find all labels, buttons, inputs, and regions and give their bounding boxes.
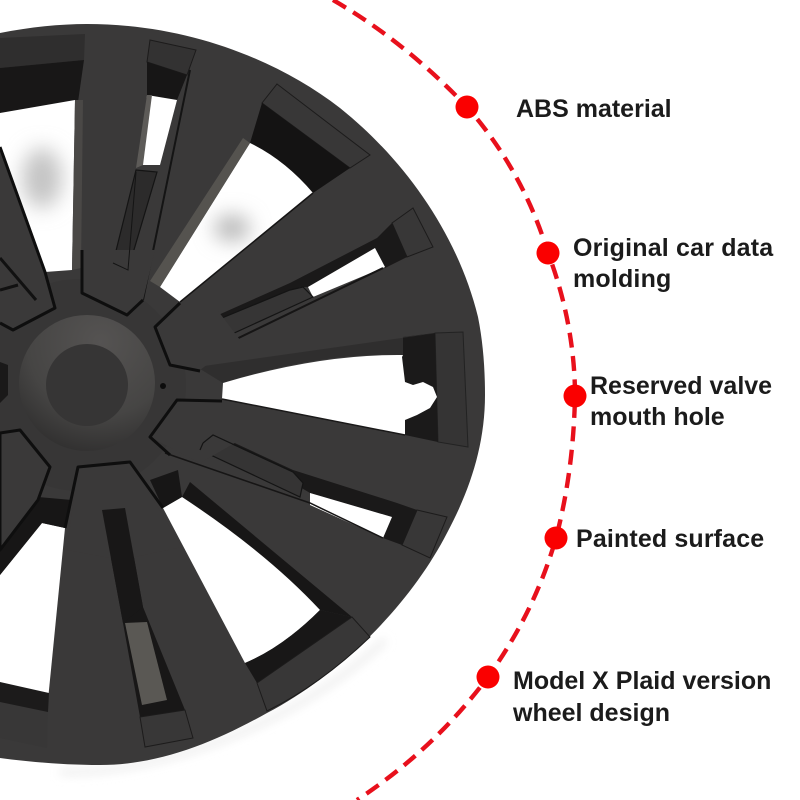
label: Painted surface: [576, 525, 764, 553]
lower right slot: [165, 399, 447, 558]
label: molding: [573, 265, 671, 293]
bottom slot: [102, 508, 193, 747]
marker dot: [476, 666, 500, 688]
upper right window: [150, 84, 370, 302]
lower right window: [163, 482, 370, 711]
right window with valve notch: [197, 332, 468, 447]
marker dot: [564, 384, 586, 408]
label: Original car data: [573, 234, 774, 262]
lower left spoke tip: [0, 430, 50, 550]
upper left spoke tip: [0, 147, 55, 330]
bottom-left window: [0, 497, 72, 748]
hub dark web lower right: [150, 470, 182, 508]
lower right spoke tip: [150, 400, 293, 472]
top centre spoke tip: [82, 172, 155, 315]
bottom spoke tip: [65, 462, 182, 623]
top-left window: [0, 34, 85, 272]
wheel rim body: [0, 24, 485, 765]
label: wheel design: [512, 699, 670, 727]
hub cap outer: [19, 315, 155, 451]
narrow top slot: [113, 40, 196, 300]
marker dot: [536, 242, 560, 264]
left spoke tip: [0, 362, 8, 403]
right slot: [187, 208, 433, 363]
label: Reserved valve: [590, 372, 772, 400]
upper right spoke tip: [155, 287, 240, 371]
callout: reserved valve mouth hole: [564, 372, 772, 431]
callout: model x plaid wheel design: [476, 666, 771, 727]
valve pin hole: [160, 383, 166, 389]
callout: painted surface: [544, 525, 764, 553]
icon: wheel cover: [0, 24, 485, 772]
wheel soft shadow: [60, 640, 385, 772]
label: ABS material: [516, 95, 672, 123]
hub cap inner: [46, 344, 128, 426]
callout: ABS material: [456, 95, 672, 123]
label: mouth hole: [590, 403, 725, 431]
dashed callout arc: [333, 0, 575, 800]
hub base: [0, 279, 186, 491]
marker dot: [456, 96, 478, 118]
label: Model X Plaid version: [513, 667, 771, 695]
marker dot: [544, 526, 568, 550]
callout: original car data molding: [536, 234, 774, 293]
